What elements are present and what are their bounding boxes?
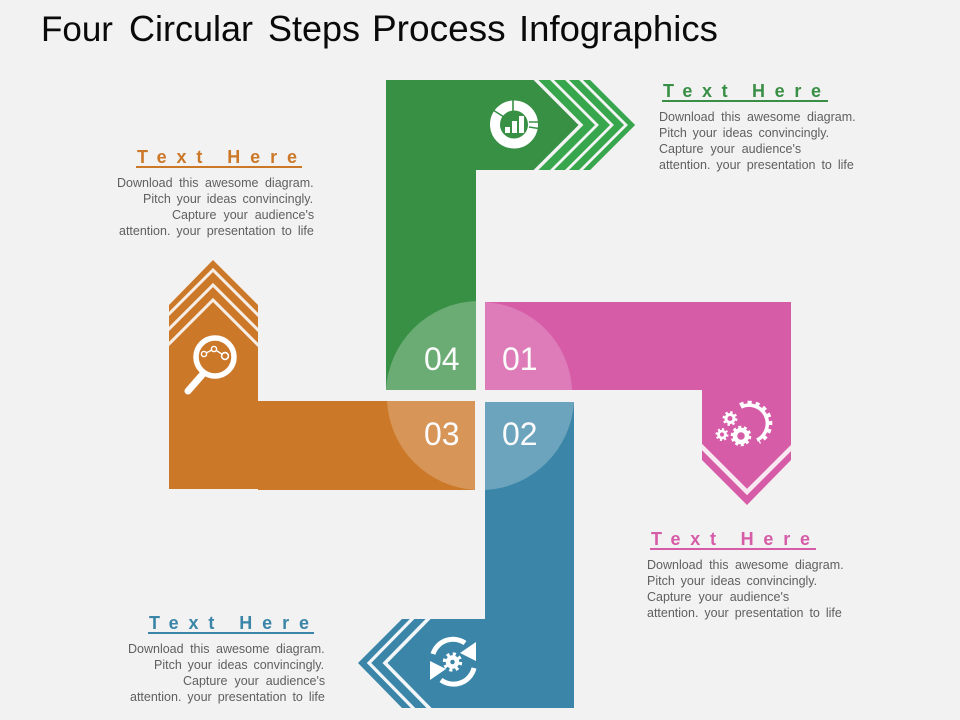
title: Steps (268, 8, 360, 49)
number 03: 03 (424, 416, 460, 452)
center circle quadrant 01 (485, 302, 572, 390)
panel: step 04 green arrow (386, 76, 639, 390)
text block: pink (647, 529, 844, 620)
text block: blue: Capture your audience's (183, 674, 325, 688)
panel: step 02 blue arrow (358, 402, 574, 711)
text block: blue: Download this awesome diagram. (128, 642, 325, 656)
title: Circular (129, 8, 253, 49)
text block: orange: Download this awesome diagram. (117, 176, 314, 190)
text block: blue (128, 613, 325, 704)
number 02: 02 (502, 416, 538, 452)
text block: blue: Pitch your ideas convincingly. (154, 658, 324, 672)
center circle quadrant 02 (485, 402, 574, 490)
text block: orange: attention. your presentation to life (119, 224, 314, 238)
text block: orange: Text Here (137, 147, 297, 167)
number 04: 04 (424, 341, 460, 377)
text block: orange (117, 147, 314, 238)
text block: blue: Text Here (149, 613, 309, 633)
number 01: 01 (502, 341, 538, 377)
text block: orange: Capture your audience's (172, 208, 314, 222)
text block: green: attention. your presentation to life (659, 158, 854, 172)
text block: green: Download this awesome diagram. (659, 110, 856, 124)
panel: step 01 pink arrow (485, 302, 796, 505)
title: Process (372, 8, 506, 49)
text block: pink: Capture your audience's (647, 590, 789, 604)
title: Four (41, 10, 113, 49)
icon: refresh arrows with gear (430, 639, 476, 684)
center circle quadrant 04 (386, 301, 476, 390)
text block: pink: Text Here (651, 529, 810, 549)
icon: magnifier with line chart (188, 338, 234, 391)
text block: pink: attention. your presentation to life (647, 606, 842, 620)
text block: orange: Pitch your ideas convincingly. (143, 192, 313, 206)
panel: step 03 orange arrow (165, 260, 475, 490)
text block: green: Text Here (663, 81, 821, 101)
text block: green (659, 81, 856, 172)
text block: blue: attention. your presentation to life (130, 690, 325, 704)
text block: green: Pitch your ideas convincingly. (659, 126, 829, 140)
text block: pink: Download this awesome diagram. (647, 558, 844, 572)
center circle quadrant 03 (387, 401, 475, 490)
text block: green: Capture your audience's (659, 142, 801, 156)
title: Infographics (519, 8, 718, 49)
icon: donut chart (493, 99, 542, 144)
icon: gears (716, 403, 770, 445)
text block: pink: Pitch your ideas convincingly. (647, 574, 817, 588)
